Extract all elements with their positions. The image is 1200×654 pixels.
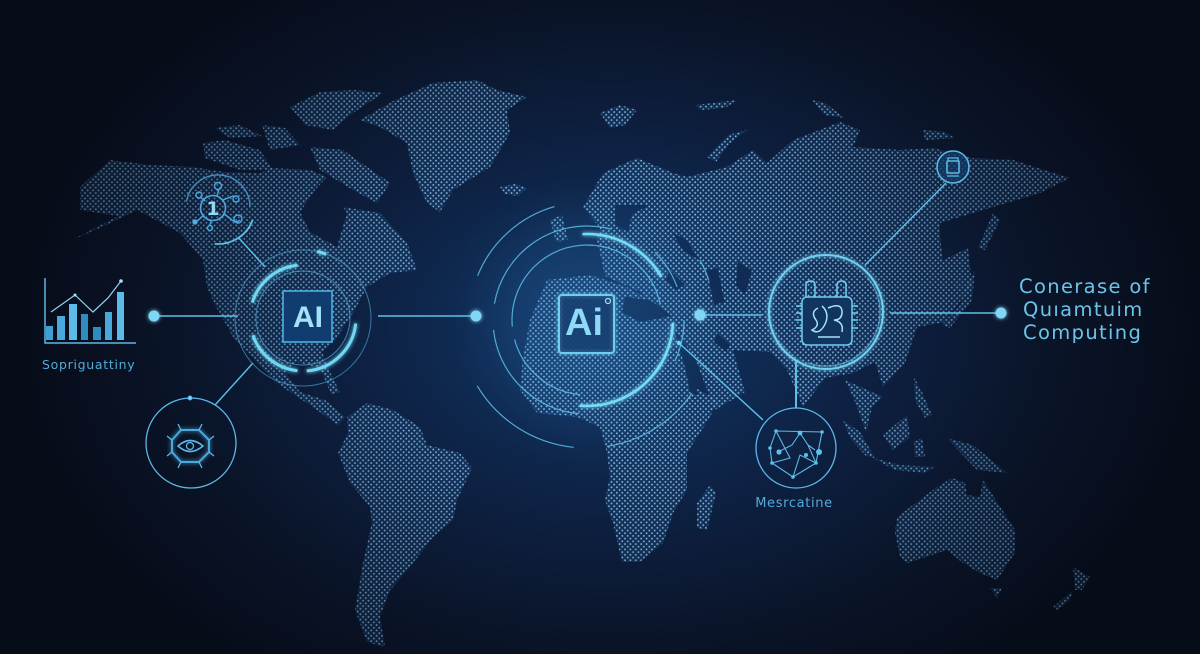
label: Conerase of Quiamtuim Computing <box>1019 275 1151 344</box>
map: UK <box>550 215 568 242</box>
map: Europe and Asia <box>583 122 1070 410</box>
map: Greenland <box>360 80 527 212</box>
node: top-right small chip <box>937 151 969 183</box>
hub: left AI: AI <box>293 301 323 334</box>
map: South America <box>338 403 472 647</box>
label: Conerase of Quiamtuim Computing: Computing <box>1023 321 1142 344</box>
glow behind centre hub <box>487 220 687 420</box>
world map <box>72 80 1090 647</box>
map: North America <box>72 160 417 425</box>
node: bottom-right molecular network <box>756 408 836 488</box>
connector dots <box>148 308 1006 345</box>
map: Canadian Arctic islands <box>203 90 390 203</box>
inland seas cutouts <box>615 205 752 395</box>
map: Africa <box>520 275 718 562</box>
map: Japan <box>942 270 975 328</box>
map: Tasmania and New Zealand <box>990 567 1090 610</box>
connector lines <box>154 183 1001 420</box>
chart: bars and trend <box>45 278 136 343</box>
hub: centre Ai <box>409 142 765 498</box>
map: Madagascar <box>697 485 716 530</box>
map: Iceland <box>500 184 527 196</box>
hub: right quantum chip <box>750 236 902 388</box>
label: Sopriguattiny: Sopriguattiny <box>42 357 135 372</box>
node: top-left network icon <box>171 160 265 254</box>
node: top-left network icon: 1 <box>206 198 220 220</box>
map: Southeast Asia <box>845 380 883 432</box>
map: Australia <box>895 478 1015 580</box>
hub: left AI <box>222 237 384 399</box>
map: Indonesia and Philippines <box>843 377 1007 473</box>
node: bottom-left eye icon <box>146 396 236 488</box>
label: Conerase of Quiamtuim Computing: Quıamtuim <box>1023 298 1144 321</box>
hub: centre Ai: Ai <box>565 302 603 344</box>
label: Conerase of Quiamtuim Computing: Conerase of <box>1019 275 1151 298</box>
label: Mesrcatine: Mesrcatine <box>755 496 833 511</box>
map: Kamchatka and Novaya Zemlya <box>600 100 1000 250</box>
icon: chip <box>796 281 858 345</box>
